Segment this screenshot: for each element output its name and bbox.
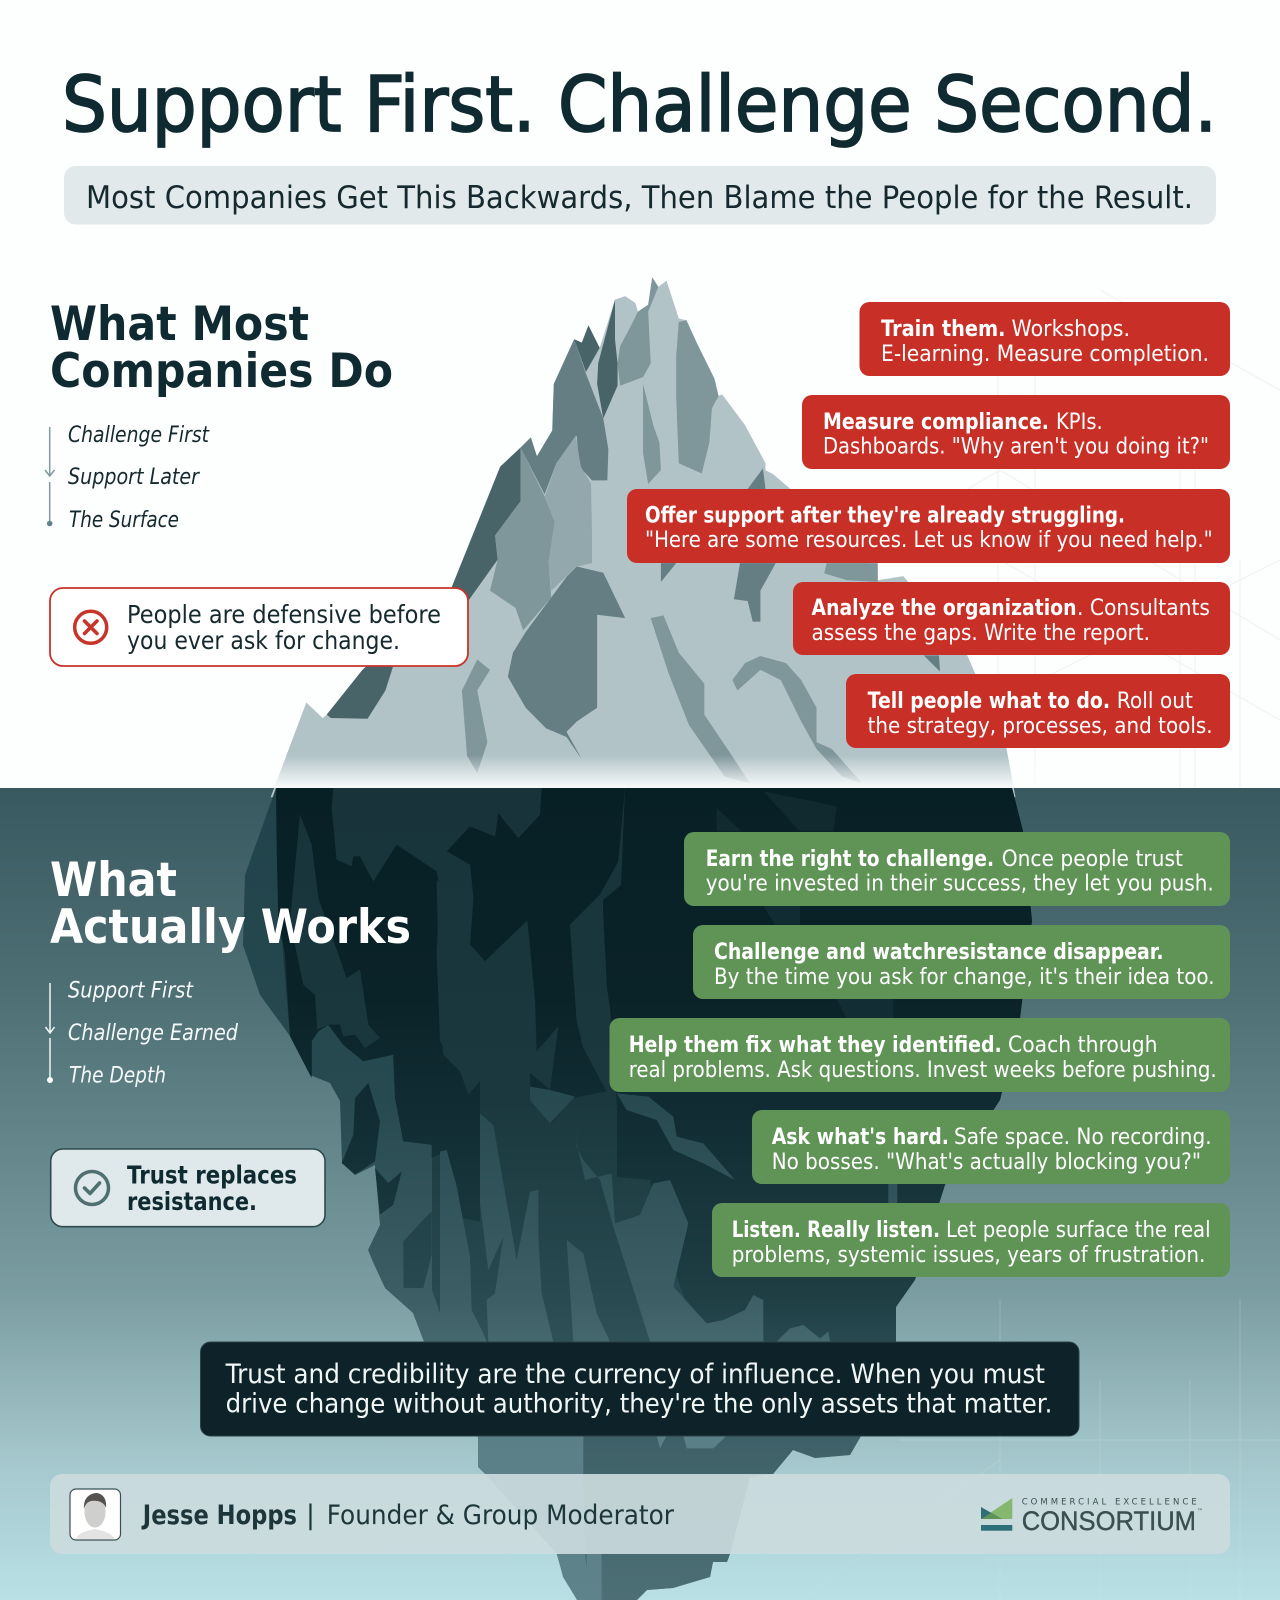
- callout: defensive: People are defensive before: [127, 600, 441, 629]
- red box: offer support: Offer support after they're already struggling.: [645, 503, 1125, 529]
- green box: earn the right: Once people trust: [1002, 846, 1183, 872]
- red box: tell people: the strategy, processes, and tools.: [868, 713, 1213, 739]
- subtitle banner: Most Companies Get This Backwards, Then Blame the People for the Result.: [86, 180, 1193, 216]
- footer bar: Founder & Group Moderator: [327, 1500, 674, 1531]
- takeaway banner: drive change without authority, they're the only assets that matter.: [226, 1389, 1052, 1420]
- footer bar: Jesse Hopps: [141, 1500, 297, 1531]
- callout: trust replaces resistance: Trust replaces: [127, 1160, 297, 1189]
- icon: check in circle: [76, 1172, 108, 1204]
- red box: measure compliance: KPIs.: [1056, 409, 1103, 435]
- green box: listen: problems, systemic issues, years of frustration.: [732, 1242, 1205, 1268]
- green box: ask what's hard: No bosses. "What's actually blocking you?": [772, 1149, 1201, 1175]
- list: the surface: The Surface: [69, 508, 179, 533]
- green box: challenge and watch: By the time you ask for change, it's their idea too.: [714, 964, 1215, 990]
- red box: tell people: [846, 674, 1230, 748]
- logo: COMMERCIAL EXCELLENCE: [1022, 1497, 1197, 1507]
- green box: earn the right: [684, 832, 1230, 906]
- logo: CONSORTIUM: [1022, 1506, 1196, 1536]
- red box: tell people: Roll out: [1117, 688, 1193, 714]
- list: the depth: [68, 978, 239, 1089]
- footer bar: |: [306, 1500, 315, 1531]
- red box: train them: Train them.: [881, 316, 1006, 342]
- iceberg above water: [240, 277, 1040, 797]
- green box: earn the right: you're invested in their success, they let you push.: [706, 871, 1214, 897]
- list: the surface: [68, 423, 210, 533]
- red box: offer support: "Here are some resources. Let us know if you need help.": [645, 527, 1213, 553]
- green box: help them fix: [610, 1018, 1230, 1092]
- portrait: [70, 1489, 120, 1540]
- green box: challenge and watch: [693, 925, 1230, 999]
- footer bar: [50, 1474, 1230, 1554]
- red box: train them: E-learning. Measure completion.: [881, 341, 1209, 367]
- list: the depth: Support First: [68, 978, 194, 1003]
- subtitle banner: [64, 166, 1216, 224]
- list: the surface: Support Later: [68, 465, 201, 490]
- red box: analyze: Analyze the organization: [812, 595, 1076, 621]
- callout: trust replaces resistance: resistance.: [127, 1187, 257, 1216]
- red box: measure compliance: Dashboards. "Why aren't you doing it?": [823, 434, 1209, 460]
- logo: ™: [1197, 1508, 1203, 1515]
- green box: ask what's hard: [752, 1110, 1230, 1184]
- green box: earn the right: Earn the right to challenge.: [706, 846, 994, 872]
- callout: defensive: [50, 588, 468, 666]
- green box: ask what's hard: Safe space. No recording.: [954, 1124, 1212, 1150]
- green box: help them fix: Coach through: [1008, 1032, 1158, 1058]
- icon: x in circle: [75, 611, 107, 643]
- heading: what actually works: What: [50, 853, 177, 908]
- red box: analyze: assess the gaps. Write the report.: [812, 620, 1150, 646]
- red box: measure compliance: [802, 395, 1230, 469]
- takeaway banner: Trust and credibility are the currency of influence. When you must: [225, 1359, 1045, 1390]
- red box: analyze: . Consultants: [1077, 595, 1210, 621]
- progression arrow: challenge first: [45, 427, 54, 526]
- green box: listen: Listen. Really listen.: [732, 1217, 940, 1243]
- green box: ask what's hard: Ask what's hard.: [772, 1124, 949, 1150]
- green box: help them fix: Help them fix what they identified.: [629, 1032, 1002, 1058]
- callout: defensive: you ever ask for change.: [127, 626, 400, 655]
- list: the depth: The Depth: [69, 1064, 166, 1089]
- red box: train them: Workshops.: [1012, 316, 1130, 342]
- green box: listen: [712, 1203, 1230, 1277]
- red box: tell people: Tell people what to do.: [868, 688, 1110, 714]
- red box: offer support: [627, 489, 1230, 563]
- heading: what actually works: Actually Works: [50, 900, 411, 955]
- progression arrow: support first: [46, 983, 54, 1083]
- water background: [0, 788, 1280, 1600]
- callout: trust replaces resistance: [51, 1149, 325, 1227]
- red box: train them: [860, 302, 1230, 376]
- takeaway banner: [200, 1342, 1079, 1436]
- heading: what actually works: [50, 853, 411, 955]
- green box: listen: Let people surface the real: [946, 1217, 1211, 1243]
- heading: what most companies do: Companies Do: [50, 344, 393, 399]
- red box: measure compliance: Measure compliance.: [823, 409, 1049, 435]
- green box: challenge and watch: Challenge and watchresistance disappear.: [714, 939, 1164, 965]
- red box: analyze: [793, 582, 1230, 655]
- list: the surface: Challenge First: [68, 423, 210, 448]
- heading: what most companies do: What Most: [50, 297, 309, 352]
- green box: help them fix: real problems. Ask questions. Invest weeks before pushing.: [629, 1057, 1217, 1083]
- logo: [981, 1497, 1203, 1536]
- list: the depth: Challenge Earned: [68, 1021, 239, 1046]
- iceberg below water: [243, 788, 1032, 1600]
- heading: what most companies do: [50, 297, 393, 399]
